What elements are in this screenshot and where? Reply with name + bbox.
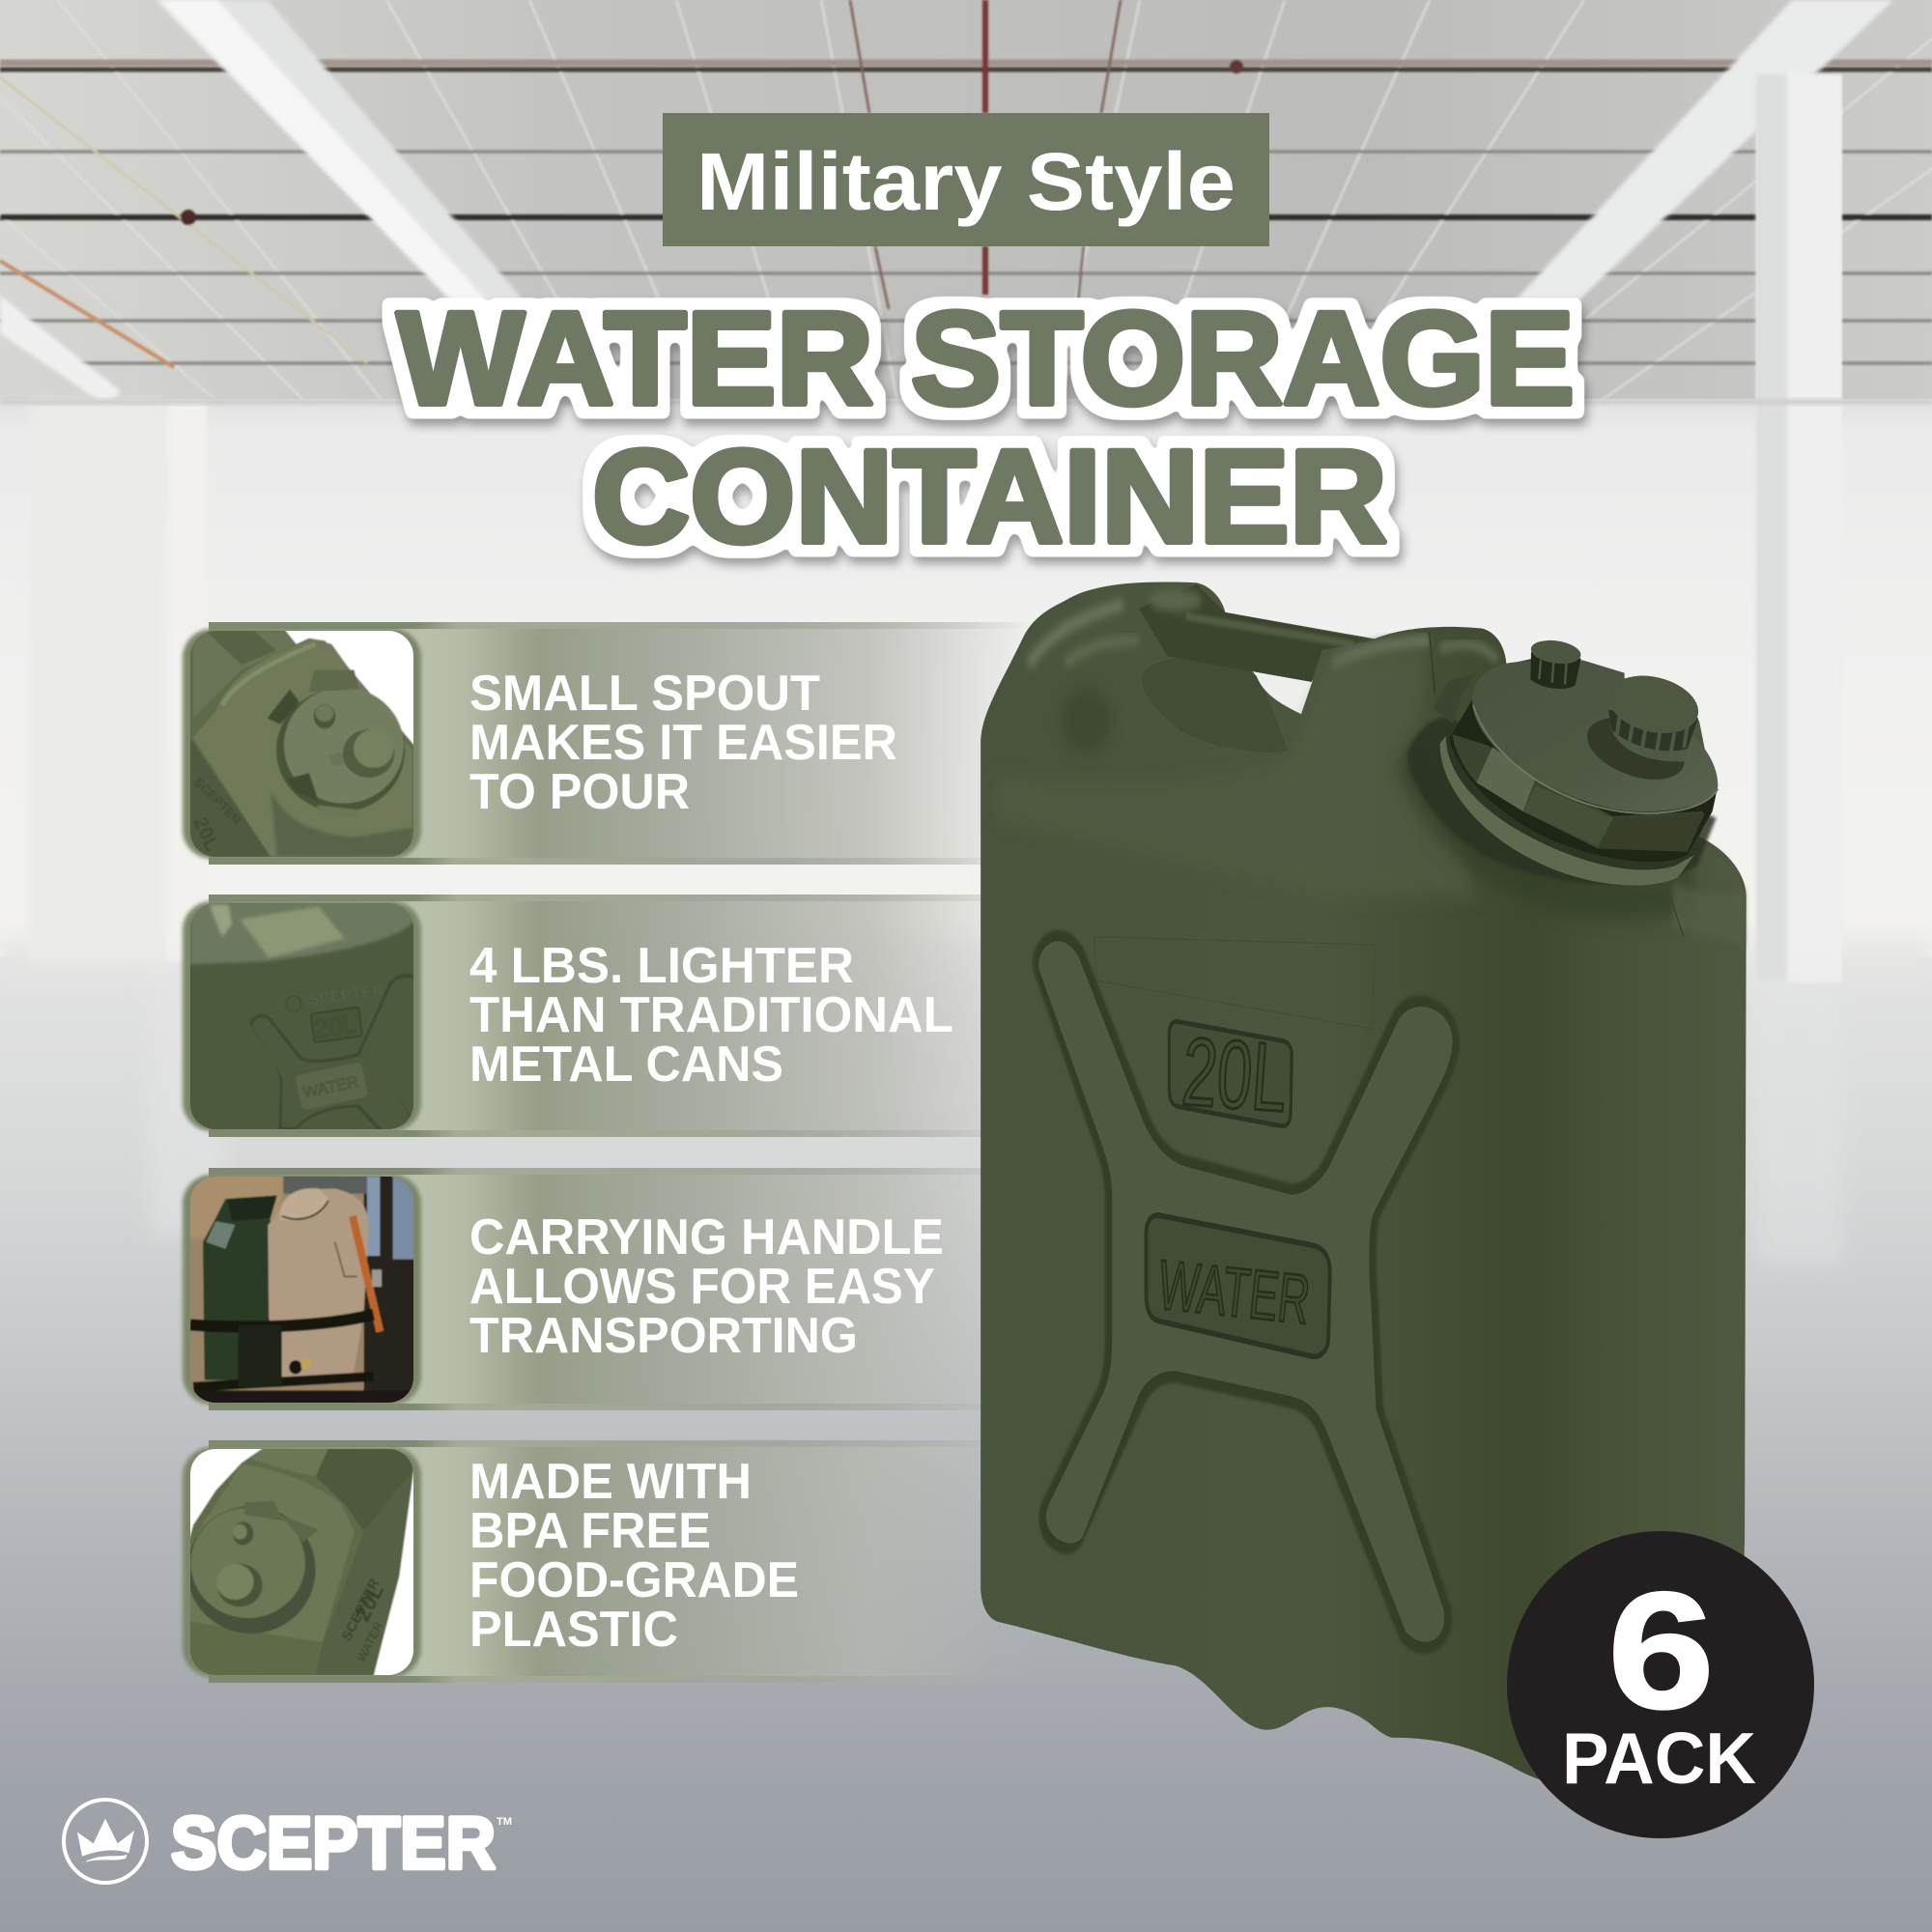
text: carrying handle: CARRYING HANDLE [469, 1209, 944, 1265]
logo: Scepter [64, 1800, 512, 1885]
text: BPA free plastic: PLASTIC [469, 1602, 678, 1658]
badge: 6 pack [1507, 1531, 1814, 1838]
panel: carrying handle [183, 1168, 1034, 1410]
photo: cap and shoulder of can: WATER [355, 1619, 385, 1664]
icon: crown in circle [64, 1800, 147, 1883]
cap assembly [1407, 638, 1718, 886]
text: small spout: TO POUR [469, 764, 690, 820]
logo: Scepter: TM [497, 1816, 512, 1828]
text: carrying handle: TRANSPORTING [469, 1308, 858, 1364]
embossed X pattern [1037, 935, 1456, 1648]
photo: cap and shoulder of can [183, 1442, 421, 1684]
panel: BPA free plastic [183, 1440, 1034, 1684]
photo: can front embossing [183, 898, 421, 1133]
photo: cap and shoulder of can: 20L [350, 1578, 388, 1626]
text: carrying handle: ALLOWS FOR EASY [469, 1259, 934, 1315]
panel: small spout [183, 622, 1034, 865]
product: green 20L jerry can [980, 582, 1747, 1810]
photo: spout close-up: 20L [188, 813, 223, 854]
photo: cans on a vehicle rack [183, 1170, 421, 1407]
text: BPA free plastic: BPA FREE [469, 1503, 711, 1559]
text: lighter weight: THAN TRADITIONAL [469, 987, 952, 1043]
heading: CONTAINER: CONTAINER [592, 423, 1387, 571]
label box: WATER [1146, 1215, 1330, 1356]
text: lighter weight: METAL CANS [469, 1037, 783, 1093]
photo: can front embossing: SCEPTER [307, 980, 384, 1009]
text: lighter weight: 4 LBS. LIGHTER [469, 938, 854, 994]
text: small spout: MAKES IT EASIER [469, 715, 897, 771]
photo: spout close-up [183, 625, 421, 863]
photo: can front embossing: 20L [312, 1009, 357, 1043]
photo: spout close-up: SCEPTER [191, 775, 244, 828]
wordmark: SCEPTER: SCEPTER [171, 1803, 496, 1885]
embossed text: WATER: WATER [1154, 1246, 1314, 1339]
photo: can front embossing: WATER [301, 1072, 360, 1102]
heading: WATER STORAGE: WATER STORAGE [397, 285, 1575, 433]
text: small spout: SMALL SPOUT [469, 666, 820, 722]
title badge: Military Style [663, 113, 1269, 246]
badge: 6 pack: 6 [1607, 1558, 1715, 1744]
photo: cap and shoulder of can: SCEPTER [339, 1576, 383, 1644]
badge: 6 pack: PACK [1562, 1718, 1756, 1799]
label box: 20L [1169, 1022, 1292, 1126]
text: BPA free plastic: FOOD-GRADE [469, 1552, 799, 1608]
title badge: Military Style: Military Style [696, 136, 1236, 227]
embossed text: 20L: 20L [1179, 1017, 1291, 1132]
text: BPA free plastic: MADE WITH [469, 1454, 752, 1510]
panel: lighter weight [183, 895, 1034, 1137]
